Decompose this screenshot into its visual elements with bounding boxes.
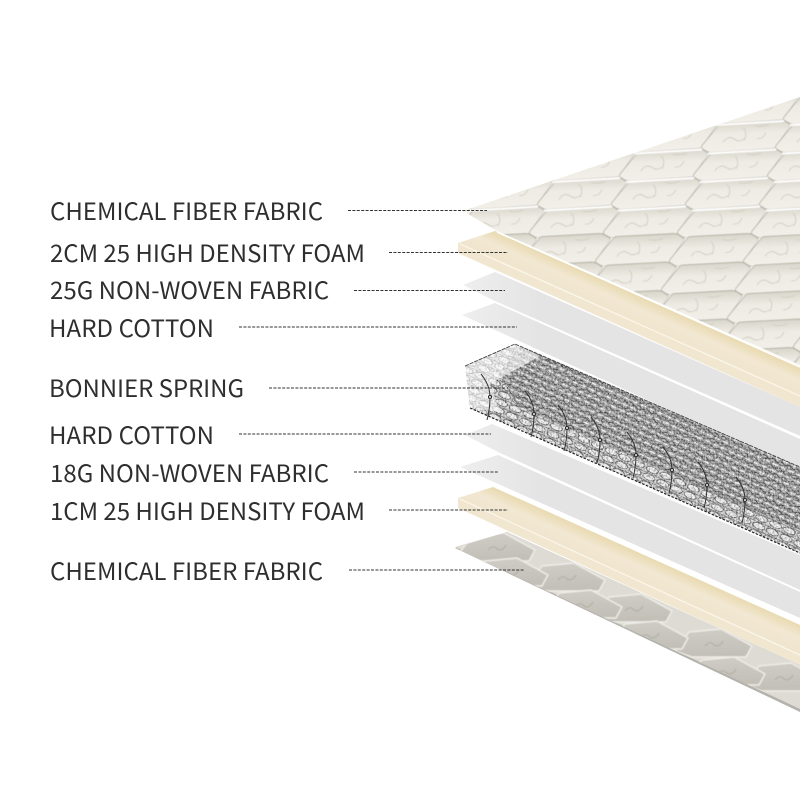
layer: upper hard cotton (462, 303, 800, 470)
label: 2cm foam: 2CM 25 HIGH DENSITY FOAM (50, 234, 365, 269)
layer: bottom chemical fiber fabric (455, 532, 800, 712)
label: hard cotton (upper): HARD COTTON (49, 309, 214, 344)
label: 1cm foam: 1CM 25 HIGH DENSITY FOAM (50, 492, 365, 527)
layer: bonnier spring (460, 340, 800, 560)
spring coil connectors (481, 374, 747, 523)
layer: lower 1cm foam (458, 487, 800, 665)
label: chemical fiber fabric (top): CHEMICAL FIBER FABRIC (50, 192, 323, 227)
label: 25g non-woven fabric: 25G NON-WOVEN FABRIC (50, 271, 329, 306)
layer: upper 2cm foam (458, 231, 800, 407)
label: bonnier spring: BONNIER SPRING (49, 369, 244, 404)
label: 18g non-woven fabric: 18G NON-WOVEN FABRIC (50, 454, 329, 489)
label: chemical fiber fabric (bottom): CHEMICAL FIBER FABRIC (50, 552, 323, 587)
label: hard cotton (lower): HARD COTTON (49, 416, 214, 451)
layer: top chemical fiber fabric (464, 97, 800, 365)
layer: lower 18g non-woven fabric (460, 455, 800, 618)
layer: upper 25g non-woven fabric (463, 272, 800, 436)
layer: lower hard cotton (465, 424, 800, 590)
